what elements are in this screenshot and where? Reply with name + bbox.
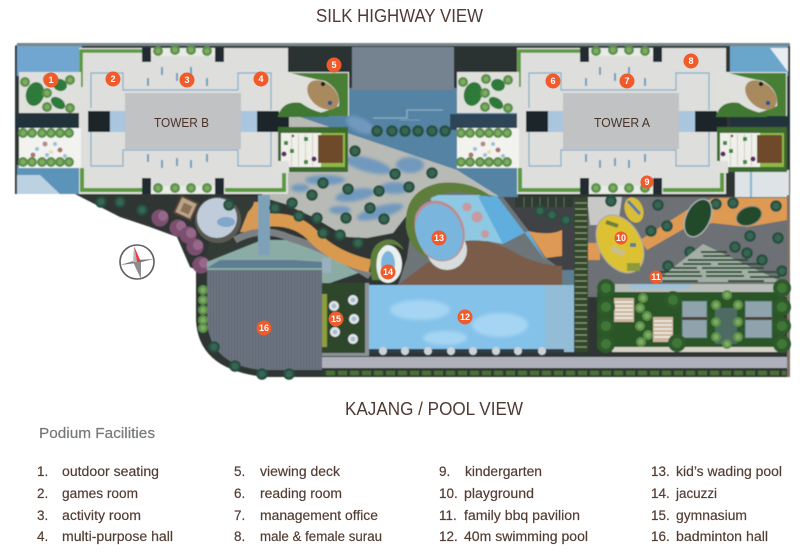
left garden: gazebo and water circle [95,196,262,274]
legend column 2: management office [260,508,378,523]
legend column 3: family bbq pavilion [464,508,580,523]
heading: kajang pool view: KAJANG / POOL VIEW [345,399,523,419]
legend column 4: 13. [651,464,670,479]
numbered facility badges: 13 [434,233,444,243]
legend column 3: 10. [439,486,458,501]
numbered facility badges: 2 [110,74,116,84]
lane ladder walkway [574,197,588,352]
legend column 2: 7. [234,508,245,523]
legend column 1: activity room [62,508,141,523]
plaza paving [262,112,500,238]
numbered facility badges: 1 [48,75,54,85]
legend column 1: multi-purpose hall [62,529,173,544]
legend column 4: gymnasium [676,508,747,523]
legend column 3: 9. [439,464,450,479]
legend column 3: 11. [439,508,457,523]
gymnasium lawn [322,283,369,356]
planter ovals [679,195,764,241]
legend column 3: playground [464,486,534,501]
numbered facility badges: 9 [644,177,650,187]
legend column 2: 6. [234,486,245,501]
legend column 3: 40m swimming pool [464,529,588,544]
legend column 2: 8. [234,529,245,544]
legend column 1: 1. [37,464,48,479]
legend column 3: kindergarten [465,464,542,479]
compass [120,245,154,279]
numbered facility badges: 4 [258,74,264,84]
legend column 4: 16. [651,529,670,544]
legend column 2: 5. [234,464,245,479]
walkway and bottom hedge [322,195,790,377]
legend column 4: kid’s wading pool [676,464,782,479]
tower labels: TOWER A [594,115,650,130]
numbered facility badges: 16 [259,323,269,333]
legend column 1: games room [62,486,138,501]
legend column 2: reading room [260,486,342,501]
numbered facility badges: 11 [651,272,661,282]
wading pool surround [398,190,575,285]
legend column 1 [37,464,173,544]
tower b block [79,45,289,194]
legend column 4: badminton hall [676,529,768,544]
tower a block [517,45,727,194]
playground yellow ovals [586,195,654,281]
heading: podium facilities: Podium Facilities [39,425,155,442]
lower garden with courts [597,279,791,353]
heading: silk highway view: SILK HIGHWAY VIEW [316,6,483,26]
numbered facility badges: 6 [550,76,556,86]
legend column 4 [651,464,782,544]
legend column 2 [234,464,382,544]
tower b wings [18,72,349,173]
legend column 3: 12. [439,529,458,544]
numbered facility badges [44,54,698,336]
numbered facility badges: 14 [383,267,393,277]
numbered facility badges: 12 [460,312,470,322]
legend column 2: viewing deck [260,464,340,479]
legend column 2: male & female surau [260,529,382,544]
bbq pavilion terraces [615,244,782,292]
legend column 1: 2. [37,486,48,501]
legend column 1: outdoor seating [62,464,159,479]
numbered facility badges: 8 [688,56,694,66]
kids wading pool [405,183,492,270]
masterplan map [15,43,791,380]
legend column 4: 15. [651,508,670,523]
numbered facility badges: 7 [624,76,630,86]
family bbq garden ground [587,195,790,297]
tower a wings [456,72,787,173]
site base [15,43,790,377]
legend column 4: 14. [651,486,670,501]
legend column 1: 3. [37,508,48,523]
numbered facility badges: 10 [616,233,626,243]
numbered facility badges: 3 [184,75,190,85]
tower labels: TOWER B [154,115,209,130]
numbered facility badges: 5 [331,60,337,70]
legend column 3 [439,464,588,544]
jacuzzi [370,239,404,283]
legend column 4: jacuzzi [675,486,717,501]
tower labels [154,115,650,130]
garden path and gravel [207,195,370,283]
numbered facility badges: 15 [331,314,341,324]
legend column 1: 4. [37,529,48,544]
badminton hall roof [198,258,331,380]
water features top band [15,43,790,200]
40m swimming pool [369,270,575,355]
